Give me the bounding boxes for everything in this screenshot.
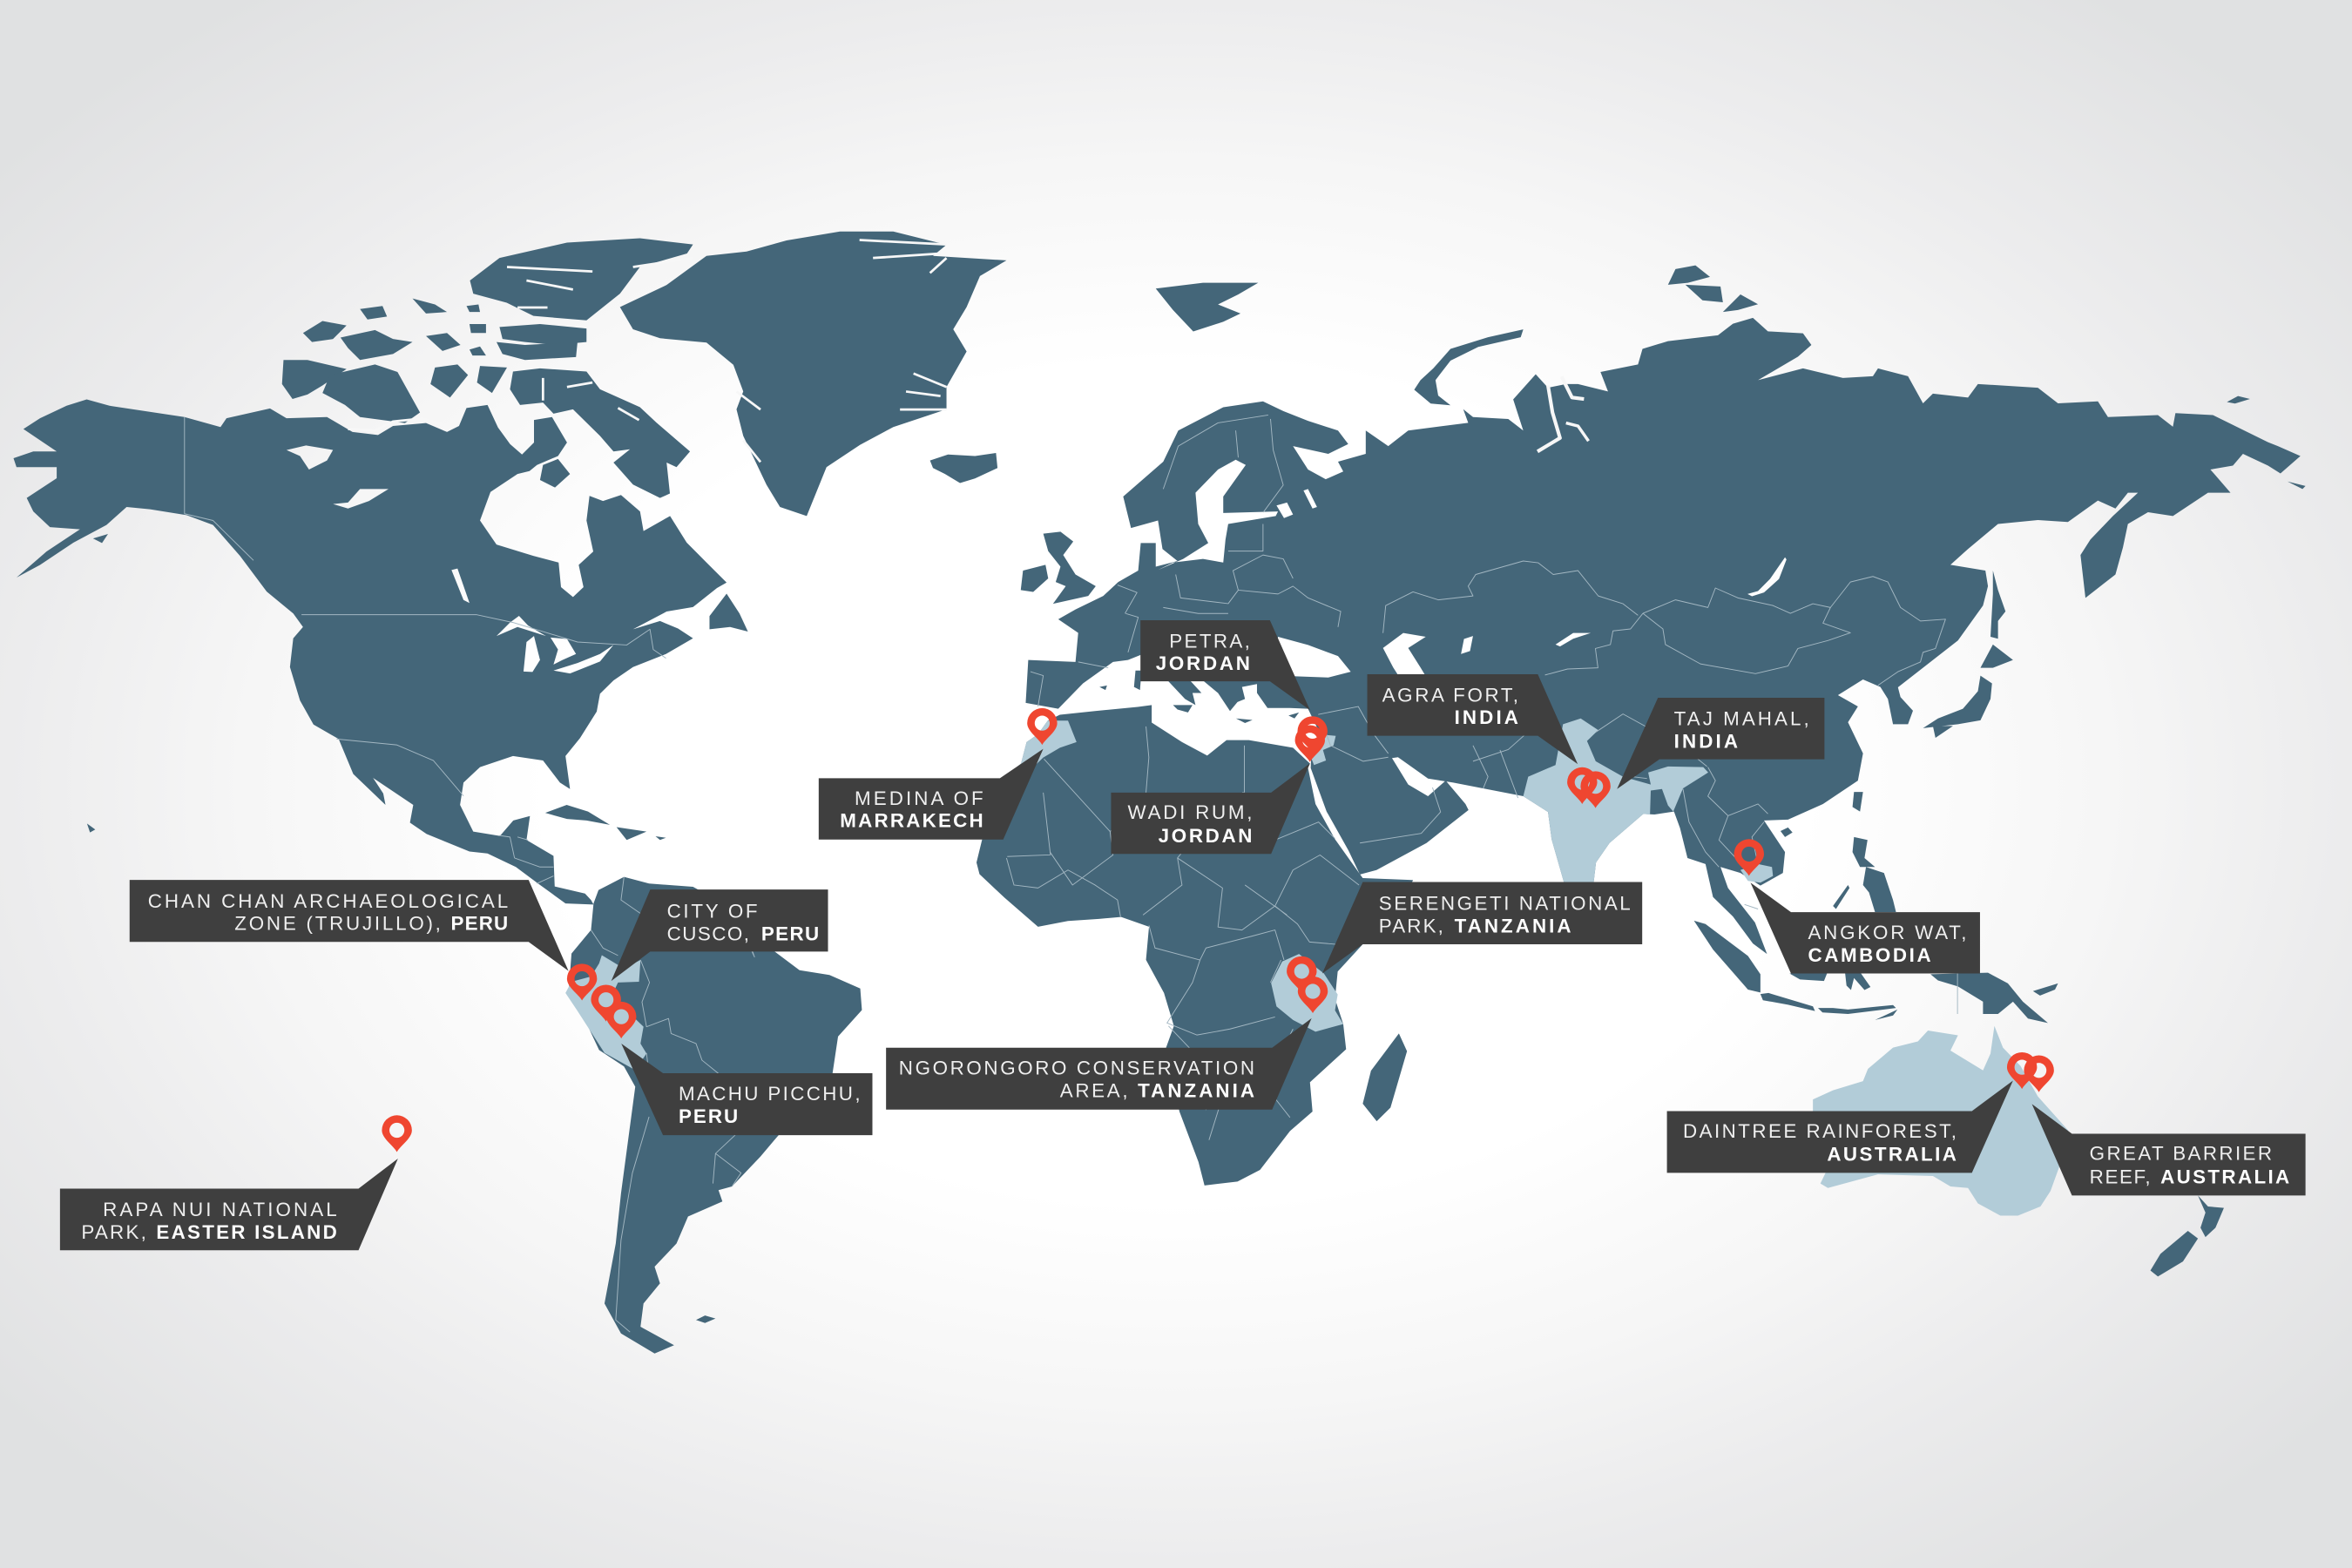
highlight: India (1524, 719, 1708, 888)
landmass: North America (13, 238, 748, 904)
label text: PARK, (81, 1221, 146, 1243)
label text (1379, 893, 1631, 937)
label text: ZONE (TRUJILLO), (234, 913, 441, 935)
label text: PARK, (1379, 916, 1443, 937)
label text: PERU (679, 1105, 738, 1127)
highlight: Jordan (1311, 735, 1335, 765)
callout box (1140, 620, 1310, 710)
callout: Agra Fort, India (1368, 674, 1578, 764)
pin: Ngorongoro (1298, 977, 1328, 1013)
pin: Daintree (2007, 1052, 2037, 1089)
pin: Great Barrier Reef (2024, 1056, 2054, 1092)
landmass: Falkland Islands (696, 1315, 715, 1323)
callout: Machu Picchu, Peru (621, 1044, 872, 1135)
lakes and inland seas (287, 445, 1787, 678)
label text: JORDAN (1156, 652, 1250, 674)
highlight: Tanzania (1271, 954, 1343, 1031)
highlight: Morocco (1004, 720, 1077, 777)
label text: MACHU PICCHU, (679, 1083, 861, 1105)
highlight: Cambodia (1740, 864, 1773, 882)
callout box (2032, 1104, 2306, 1195)
callout: Ngorongoro Conservation Area, Tanzania (886, 1018, 1312, 1110)
label text (899, 1058, 1254, 1101)
label text: NGORONGORO CONSERVATION (899, 1058, 1254, 1079)
callout box (621, 1044, 872, 1135)
label text: AGRA FORT, (1382, 684, 1518, 706)
callout: Angkor Wat, Cambodia (1751, 882, 1980, 974)
pin: Machu Picchu (606, 1002, 636, 1038)
islands: Arctic Eurasia (1156, 266, 2306, 489)
label text: REEF, (2090, 1166, 2151, 1188)
label text: INDIA (1455, 706, 1518, 728)
landmass: Eurasia (1025, 318, 2301, 954)
callout: Chan Chan, Peru (130, 880, 569, 971)
callout box (1751, 882, 1980, 974)
callout box (130, 880, 569, 971)
label text: JORDAN (1159, 825, 1252, 847)
islands: Mediterranean (1099, 671, 1299, 723)
pin: Agra Fort (1567, 767, 1598, 804)
islands: Sakhalin and Japan (1923, 571, 2013, 738)
label text (148, 890, 508, 935)
label text: SERENGETI NATIONAL (1379, 893, 1631, 915)
label text: PERU (761, 923, 819, 944)
pin: Serengeti (1287, 956, 1317, 993)
callout: City of Cusco, Peru (612, 889, 828, 981)
callout box (1617, 698, 1824, 789)
highlighted countries (565, 719, 2076, 1215)
pin: Wadi Rum (1295, 726, 1325, 762)
label text: MEDINA OF (855, 787, 983, 809)
callout: Wadi Rum, Jordan (1111, 763, 1310, 854)
label text (679, 1083, 861, 1127)
callout box (60, 1159, 398, 1250)
label text: CAMBODIA (1808, 944, 1931, 966)
label text: PERU (450, 913, 508, 935)
label text: AREA, (1060, 1079, 1128, 1101)
label text: EASTER ISLAND (156, 1221, 337, 1243)
label text: TAJ MAHAL, (1674, 708, 1809, 730)
islands: United Kingdom and Ireland (1021, 531, 1096, 604)
label text (1156, 630, 1250, 674)
label text: CHAN CHAN ARCHAEOLOGICAL (148, 890, 508, 912)
callout: Great Barrier Reef, Australia (2032, 1104, 2306, 1195)
label text (667, 900, 819, 944)
label text: GREAT BARRIER (2090, 1143, 2272, 1165)
callout box (1322, 882, 1642, 974)
label text: RAPA NUI NATIONAL (103, 1199, 337, 1220)
location pins (382, 708, 2054, 1152)
pin: Rapa Nui (382, 1115, 412, 1152)
label text: AUSTRALIA (1827, 1143, 1957, 1165)
label text (1674, 708, 1809, 753)
pin: Angkor Wat (1734, 839, 1764, 875)
pin: Chan Chan (567, 963, 597, 1001)
landmass: Iceland (930, 453, 997, 483)
landmass: Madagascar (1362, 1033, 1407, 1121)
landmass: Greenland (620, 232, 1006, 516)
pin: Petra (1297, 716, 1328, 753)
landmass: Africa (977, 705, 1413, 1186)
landmass: South America (569, 877, 862, 1354)
label text (1683, 1120, 1957, 1165)
label text: WADI RUM, (1128, 801, 1252, 823)
label text: MARRAKECH (840, 809, 983, 831)
label text: AUSTRALIA (2160, 1166, 2289, 1188)
callout box (886, 1018, 1312, 1110)
pin: Cusco (591, 984, 621, 1022)
callout: Medina of Marrakech (819, 749, 1044, 840)
pin: Taj Mahal (1580, 771, 1611, 808)
callout box (612, 889, 828, 981)
callout box (819, 749, 1044, 840)
callout box (1368, 674, 1578, 764)
islands: Southeast Asia and Oceania (1694, 792, 2224, 1276)
callout: Taj Mahal, India (1617, 698, 1824, 789)
country borders (185, 415, 1957, 1332)
world map (13, 232, 2306, 1354)
label text: CITY OF (667, 900, 758, 922)
fjords, straits and estuaries (348, 240, 1589, 462)
highlight: Australia (1813, 1026, 2076, 1215)
label text: INDIA (1674, 731, 1738, 753)
label text (1382, 684, 1518, 728)
label text: ANGKOR WAT, (1808, 922, 1966, 943)
label text: TANZANIA (1455, 916, 1571, 937)
label text: CUSCO, (667, 923, 749, 944)
label text (1128, 801, 1252, 847)
label text: DAINTREE RAINFOREST, (1683, 1120, 1957, 1142)
label text (840, 787, 983, 831)
callout box (1667, 1080, 2013, 1173)
label text: TANZANIA (1138, 1079, 1254, 1101)
callout: Petra, Jordan (1140, 620, 1310, 710)
label text (1808, 922, 1966, 966)
pin: Marrakech (1027, 708, 1058, 745)
callout: Serengeti National Park, Tanzania (1322, 882, 1642, 974)
callout box (1111, 763, 1310, 854)
label text (81, 1199, 337, 1243)
label text: PETRA, (1169, 630, 1250, 652)
callout: Rapa Nui National Park, Easter Island (60, 1159, 398, 1250)
label text (2090, 1143, 2289, 1188)
highlight: Peru (565, 956, 646, 1070)
callout: Daintree Rainforest, Australia (1667, 1080, 2013, 1173)
